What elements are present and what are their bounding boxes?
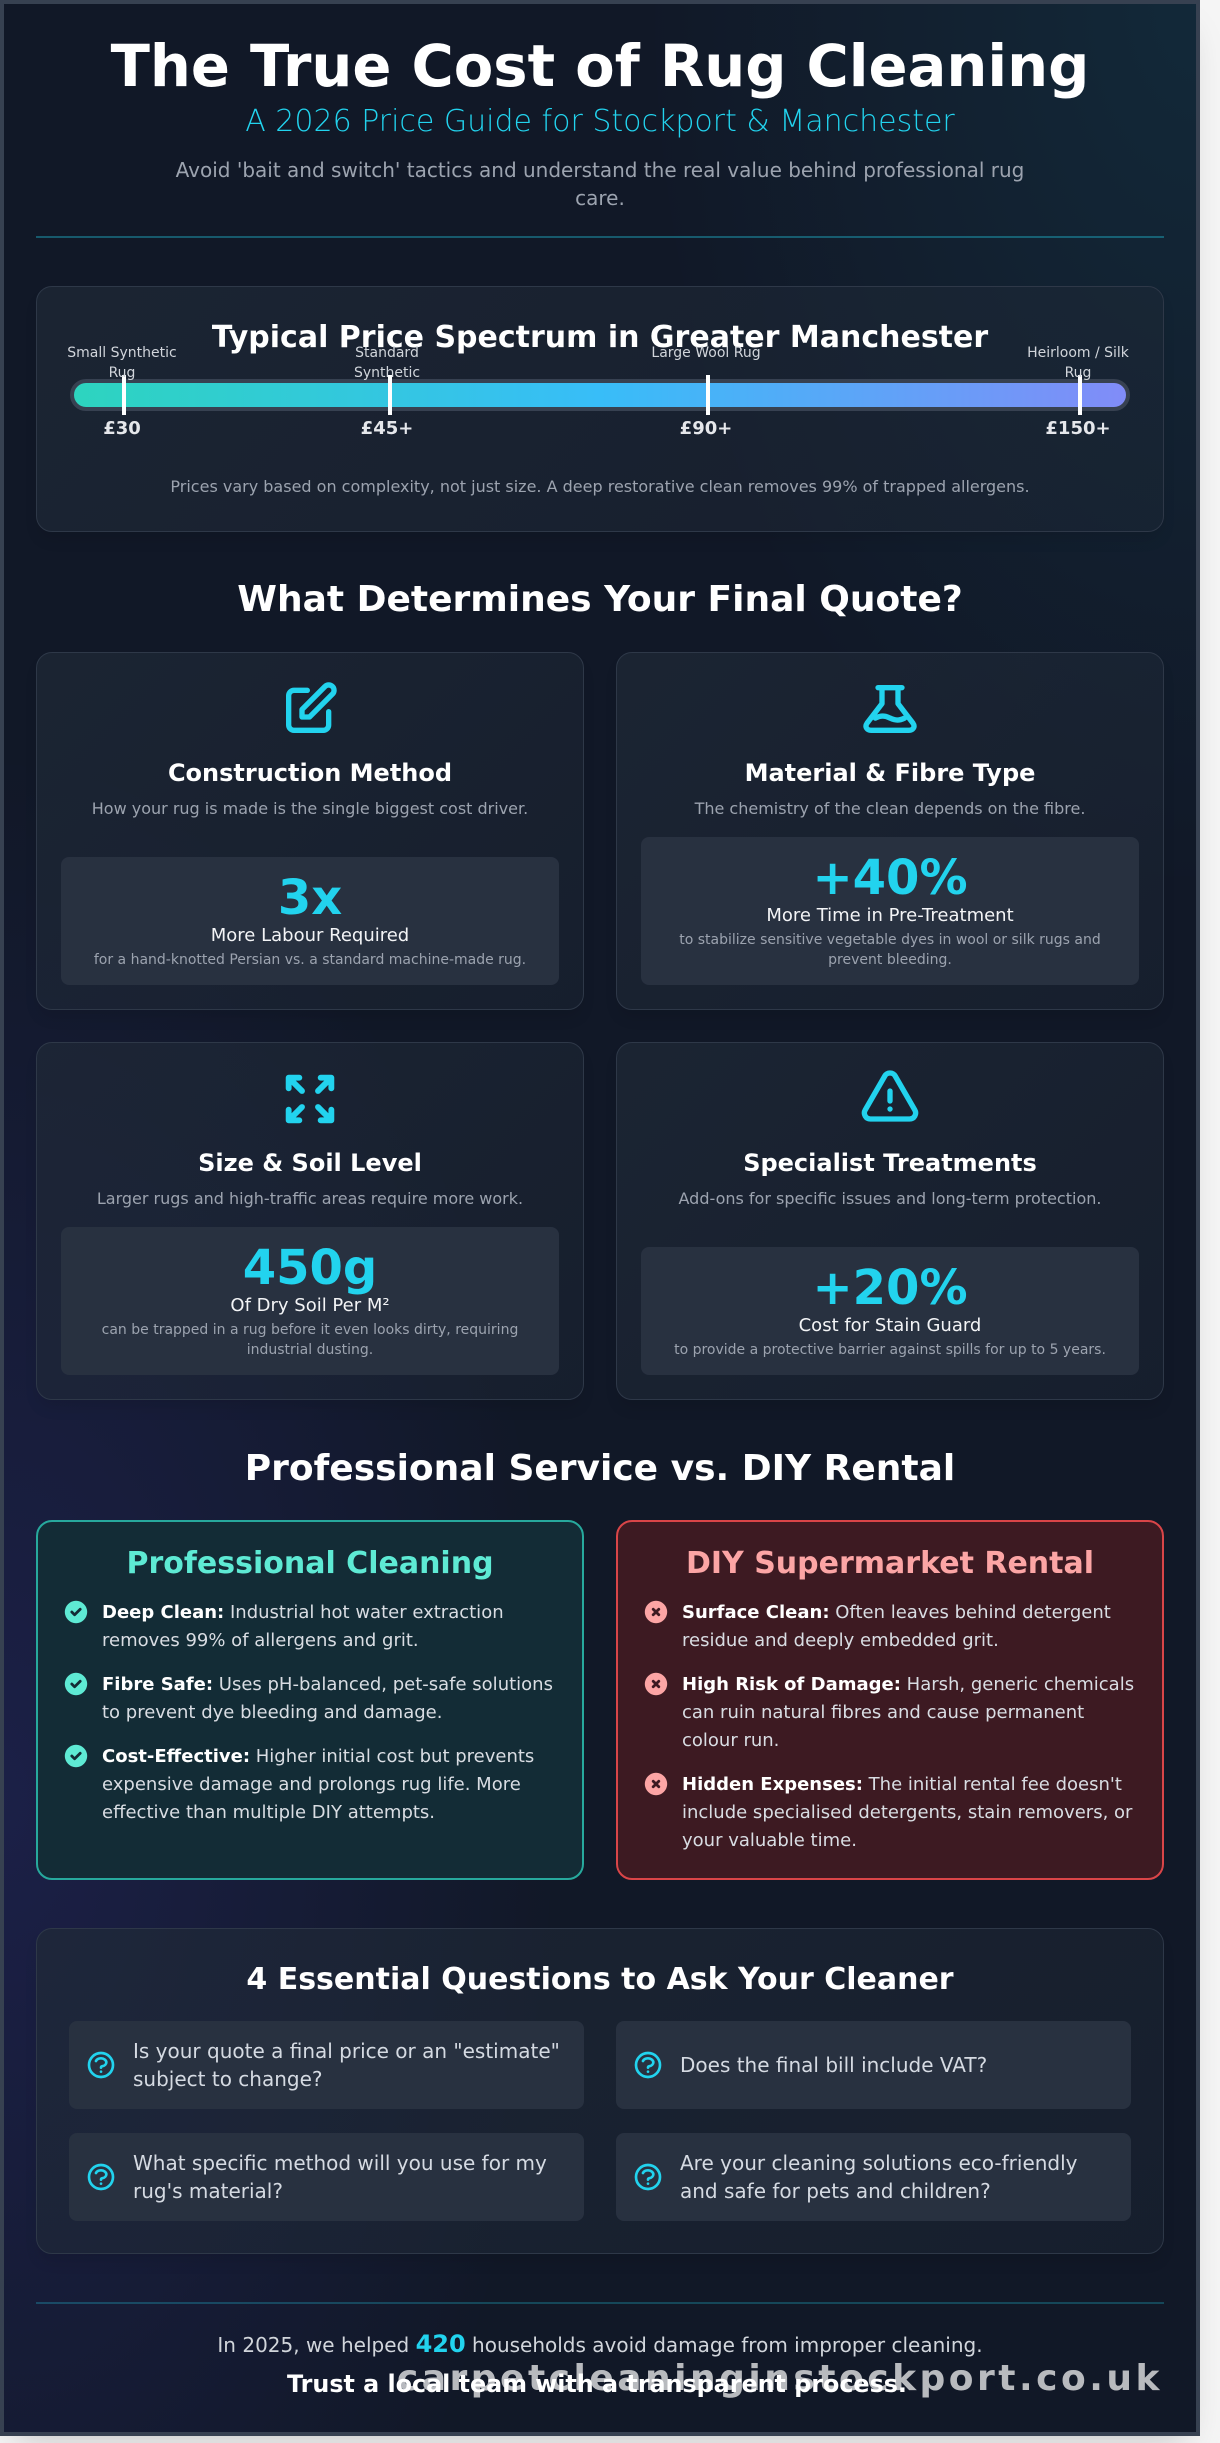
- label: large wool rug: Large Wool Rug: [651, 345, 761, 361]
- benefits list: Fibre Safe: Uses pH-balanced, pet-safe solutions to prevent dye bleeding and damage.: [102, 1674, 553, 1723]
- drawbacks list: High Risk of Damage: Harsh, generic chemicals can ruin natural fibres and cause permanent colour run.: [682, 1674, 1134, 1751]
- stat: 450g: 450g: [243, 1240, 377, 1296]
- card description: Larger rugs and high-traffic areas require more work.: [97, 1189, 523, 1208]
- panel heading: Professional Cleaning: [126, 1546, 494, 1581]
- stat: +20%: to provide a protective barrier against spills for up to 5 years.: [674, 1342, 1106, 1358]
- stat: +40%: More Time in Pre-Treatment: [766, 905, 1014, 926]
- stat: 3x: [61, 857, 559, 985]
- marker: £45+: [388, 375, 392, 415]
- question 3: [69, 2133, 584, 2221]
- card heading: Specialist Treatments: [743, 1149, 1037, 1177]
- question 1: [69, 2021, 584, 2109]
- price: £90+: £90+: [680, 418, 732, 439]
- question 2: Does the final bill include VAT?: [680, 2053, 987, 2077]
- question 2: [616, 2021, 1131, 2109]
- label: heirloom silk rug: Heirloom / Silk Rug: [1027, 345, 1129, 381]
- stat: +20%: Cost for Stain Guard: [799, 1315, 981, 1336]
- benefits list: [64, 1600, 553, 1823]
- heading: price spectrum: Typical Price Spectrum in Greater Manchester: [212, 320, 988, 355]
- panel: material and fibre: [616, 652, 1164, 1010]
- watermark: website: carpetcleaninginstockport.co.uk: [397, 2358, 1163, 2399]
- marker: £90+: [706, 375, 710, 415]
- stat: 3x: 3x: [278, 870, 342, 926]
- panel: professional cleaning: [36, 1520, 584, 1880]
- question 4: [616, 2133, 1131, 2221]
- price: £45+: £45+: [361, 418, 413, 439]
- stat: 450g: Of Dry Soil Per M²: [230, 1295, 390, 1316]
- benefits list: Deep Clean: Industrial hot water extraction removes 99% of allergens and grit.: [102, 1602, 504, 1651]
- panel: specialist treatments: [616, 1042, 1164, 1400]
- question 4: Are your cleaning solutions eco-friendly and safe for pets and children?: [680, 2151, 1078, 2203]
- stat: 3x: More Labour Required: [211, 925, 409, 946]
- panel: construction method: [36, 652, 584, 1010]
- stat: 450g: [61, 1227, 559, 1375]
- panel: price spectrum: [36, 286, 1164, 532]
- label: standard synthetic: Standard Synthetic: [354, 345, 420, 381]
- icon: warning triangle: [862, 1070, 918, 1122]
- stat: 3x: for a hand-knotted Persian vs. a standard machine-made rug.: [94, 952, 526, 968]
- marker: £150+: [1078, 375, 1082, 415]
- gradient price bar: [70, 379, 1130, 411]
- card description: How your rug is made is the single biggest cost driver.: [92, 799, 528, 818]
- icon: pencil: [286, 682, 337, 733]
- label: small synthetic rug: Small Synthetic Rug: [67, 345, 177, 381]
- card description: The chemistry of the clean depends on the fibre.: [695, 799, 1085, 818]
- price: £30: £30: [103, 418, 141, 439]
- heading: final quote: What Determines Your Final Quote?: [237, 579, 963, 620]
- stat: +40%: +40%: [812, 850, 968, 906]
- question 1: Is your quote a final price or an "estimate" subject to change?: [133, 2039, 560, 2091]
- panel: DIY rental: [616, 1520, 1164, 1880]
- card description: Add-ons for specific issues and long-term protection.: [679, 1189, 1101, 1208]
- heading: essential questions: 4 Essential Questions to Ask Your Cleaner: [246, 1962, 954, 1997]
- panel heading: DIY Supermarket Rental: [686, 1546, 1094, 1581]
- spectrum note: Prices vary based on complexity, not just size. A deep restorative clean removes 99% of trapped allergens.: [170, 477, 1030, 496]
- panel: essential questions: [36, 1928, 1164, 2254]
- intro text: Avoid 'bait and switch' tactics and understand the real value behind professional rug care.: [176, 158, 1024, 210]
- title: The True Cost of Rug Cleaning: [111, 33, 1089, 100]
- drawbacks list: Hidden Expenses: The initial rental fee doesn't include specialised detergents, stain removers, or your valuable time.: [682, 1774, 1132, 1851]
- stat: +20%: [641, 1247, 1139, 1375]
- icon: expand arrows: [286, 1074, 334, 1124]
- card heading: Size & Soil Level: [198, 1149, 422, 1177]
- subtitle: A 2026 Price Guide for Stockport & Manchester: [245, 104, 955, 139]
- footer statistic: In 2025, we helped 420 households avoid damage from improper cleaning.: [217, 2330, 983, 2358]
- stat: +40%: [641, 837, 1139, 985]
- card heading: Material & Fibre Type: [745, 759, 1035, 787]
- stat: +40%: to stabilize sensitive vegetable dyes in wool or silk rugs and prevent bleeding.: [679, 932, 1101, 968]
- card heading: Construction Method: [168, 759, 452, 787]
- heading: professional vs DIY: Professional Service vs. DIY Rental: [245, 1448, 955, 1489]
- marker: £30: [122, 375, 126, 415]
- drawbacks list: [644, 1600, 1134, 1851]
- price: £150+: £150+: [1045, 418, 1111, 439]
- stat: 450g: can be trapped in a rug before it even looks dirty, requiring industrial dusting.: [102, 1322, 518, 1358]
- icon: flask: [863, 685, 917, 733]
- question 3: What specific method will you use for my rug's material?: [133, 2151, 547, 2203]
- panel: size and soil: [36, 1042, 584, 1400]
- stat: +20%: +20%: [812, 1260, 968, 1316]
- footer call to action: Trust a local team with a transparent process.: [287, 2370, 907, 2398]
- benefits list: Cost-Effective: Higher initial cost but prevents expensive damage and prolongs rug life. More effective than multiple DIY attempts.: [102, 1746, 534, 1823]
- drawbacks list: Surface Clean: Often leaves behind detergent residue and deeply embedded grit.: [682, 1602, 1111, 1651]
